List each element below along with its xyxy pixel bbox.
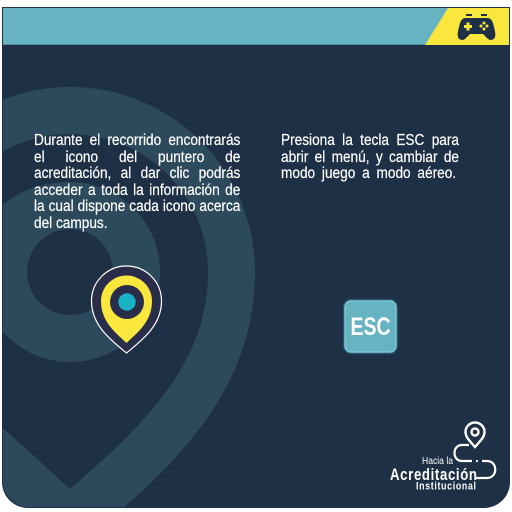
- text block: pointer instructions: [34, 132, 240, 232]
- logo pin: [466, 423, 484, 447]
- icon: game controller: [458, 14, 495, 40]
- logo text: Institucional: [416, 481, 476, 493]
- header yellow corner: [425, 8, 509, 45]
- icon: location pointer: [92, 266, 162, 353]
- text block: pointer instructions: el icono del puntero de: [34, 148, 240, 166]
- header band: [3, 8, 509, 45]
- logo text: [390, 455, 477, 493]
- text block: ESC instructions: [281, 132, 460, 182]
- logo route line: [454, 445, 495, 478]
- logo text: Hacia la: [422, 455, 453, 467]
- text block: pointer instructions: Durante el recorrido encontrarás: [34, 132, 240, 149]
- text block: ESC instructions: Presiona la tecla ESC para: [281, 132, 459, 149]
- text block: pointer instructions: del campus.: [34, 214, 108, 232]
- text block: pointer instructions: acceder a toda la información de: [34, 182, 240, 198]
- large background pin watermark: [3, 87, 255, 508]
- text block: ESC instructions: modo juego a modo aéreo.: [281, 165, 456, 182]
- text block: ESC instructions: abrir el menú, y cambiar de: [281, 148, 459, 166]
- icon: ESC key: [345, 301, 396, 352]
- icon: ESC key: ESC: [350, 313, 390, 341]
- text block: pointer instructions: acreditación, al dar clic podrás: [34, 165, 240, 182]
- logo: Hacia la Acreditación Institucional: [390, 423, 495, 493]
- logo text: Acreditación: [390, 466, 477, 484]
- text block: pointer instructions: la cual dispone cada icono acerca: [34, 198, 240, 215]
